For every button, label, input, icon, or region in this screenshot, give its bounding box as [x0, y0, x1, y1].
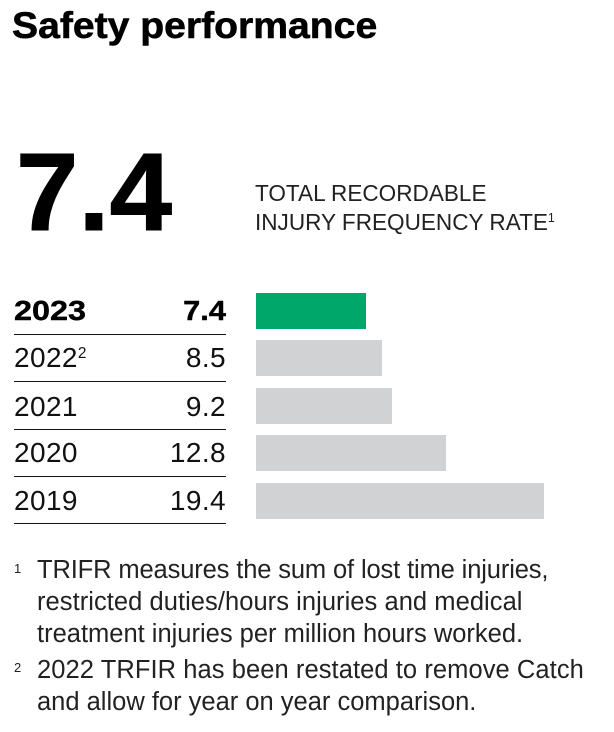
footnote 2: and allow for year on year comparison. [37, 688, 476, 716]
row 2020: 2020 [14, 437, 78, 468]
bar 2021 [256, 388, 392, 424]
footnote 1: treatment injuries per million hours worked. [37, 620, 523, 648]
bar 2019 [256, 483, 544, 519]
title: Safety performance [12, 4, 377, 46]
footnote 2: 2022 TRFIR has been restated to remove Catch [37, 656, 584, 684]
bar 2023 [256, 293, 366, 329]
big number: 7.4 [16, 131, 172, 254]
footnote 1: TRIFR measures the sum of lost time injuries, [37, 556, 548, 584]
bar 2020 [256, 435, 446, 471]
row 2022: 20222 [14, 342, 86, 373]
row 2019: 2019 [14, 485, 78, 516]
value 2021: 9.2 [186, 391, 226, 422]
bar chart [256, 293, 544, 519]
footnote 1 [14, 556, 548, 648]
value 2019: 19.4 [170, 485, 226, 516]
table: yearly rates [14, 295, 226, 524]
value 2022: 8.5 [186, 342, 226, 373]
metric label: INJURY FREQUENCY RATE1 [255, 208, 555, 234]
value 2023: 7.4 [183, 295, 226, 326]
metric label: TOTAL RECORDABLE [255, 180, 487, 206]
footnote 1: restricted duties/hours injuries and medical [37, 588, 523, 616]
footnote 2 [14, 656, 584, 716]
bar 2022 [256, 340, 382, 376]
row 2023: 2023 [14, 295, 86, 326]
row 2021: 2021 [14, 391, 78, 422]
metric label [255, 180, 555, 234]
value 2020: 12.8 [170, 437, 226, 468]
footnote 2: 2 [14, 660, 21, 675]
footnote 1: 1 [14, 560, 21, 576]
